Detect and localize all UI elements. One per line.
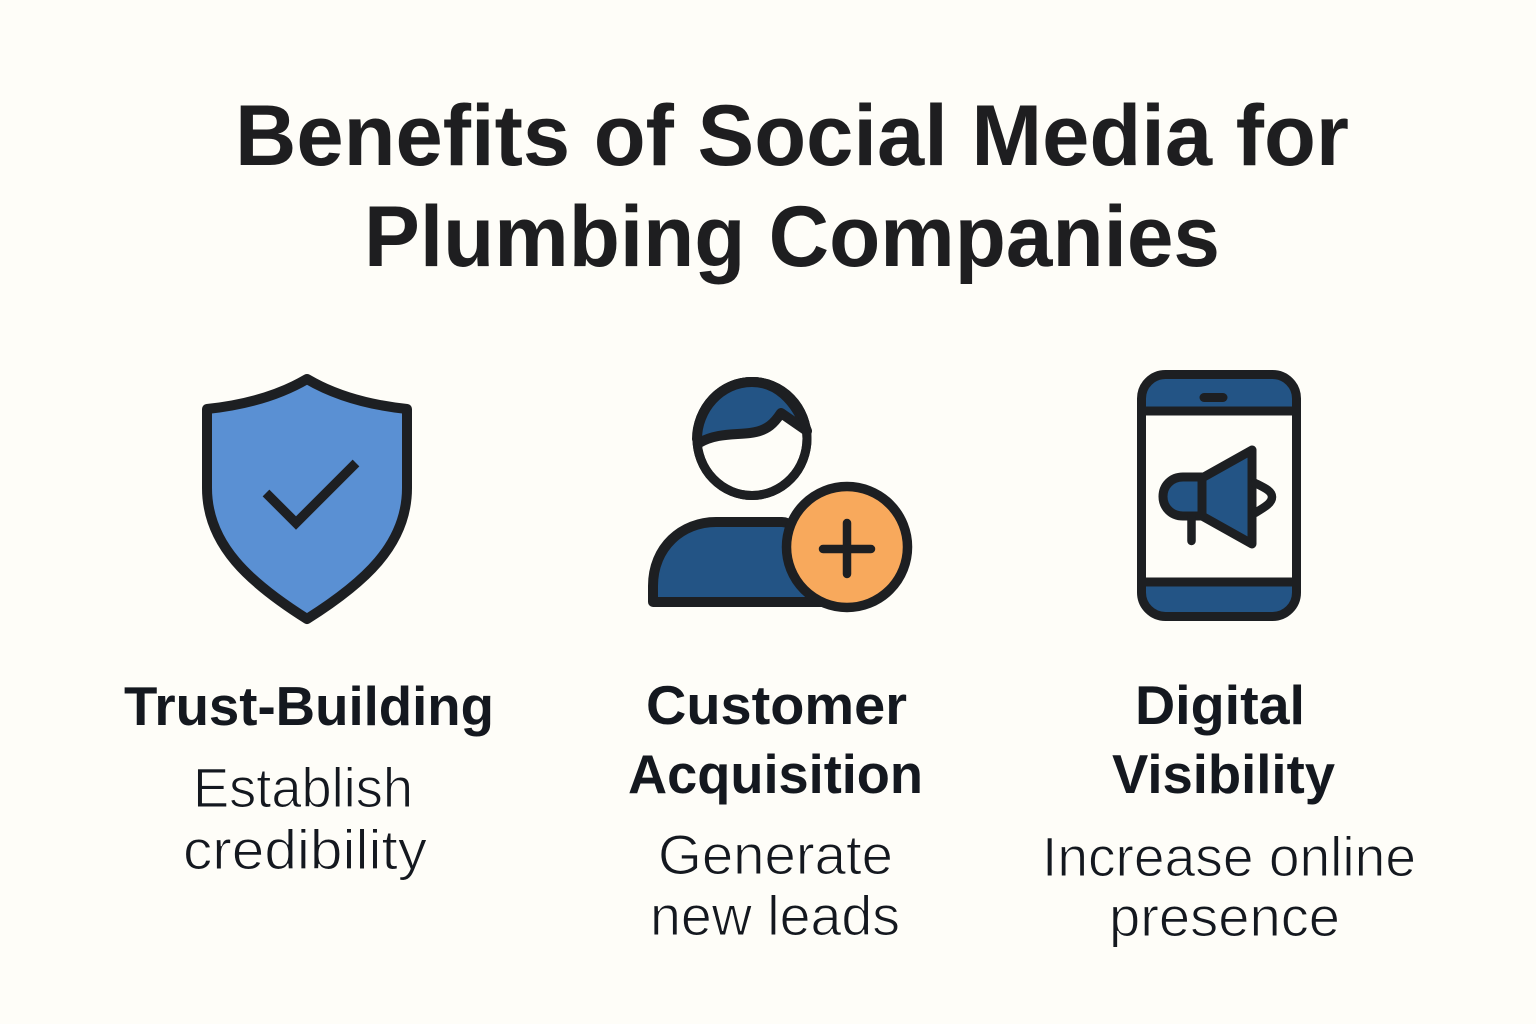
panel: customer acquisition xyxy=(628,382,923,947)
title: Benefits of Social Media for xyxy=(235,88,1349,184)
description: establish credibility: Establish xyxy=(193,756,413,819)
panel: trust-building xyxy=(124,379,494,881)
heading: Digital Visibility: Digital xyxy=(1135,674,1305,736)
title: Plumbing Companies xyxy=(364,189,1220,285)
heading: Digital Visibility: Visibility xyxy=(1112,743,1335,805)
description: increase online presence xyxy=(1042,825,1416,948)
description: establish credibility: credibility xyxy=(183,818,427,881)
heading: Trust-Building: Trust-Building xyxy=(124,675,494,737)
icon: smartphone with megaphone xyxy=(1141,374,1297,616)
icon: person with plus badge xyxy=(653,382,908,608)
icon: shield with check mark xyxy=(207,379,407,619)
description: increase online presence: Increase online xyxy=(1042,825,1416,888)
description: generate new leads xyxy=(650,823,900,947)
heading: Customer Acquisition xyxy=(628,674,923,805)
description: generate new leads: Generate xyxy=(658,823,893,886)
heading: Customer Acquisition: Customer xyxy=(646,674,907,736)
panel: digital visibility xyxy=(1042,374,1416,948)
description: establish credibility xyxy=(183,756,427,881)
description: generate new leads: new leads xyxy=(650,884,900,947)
heading: Digital Visibility xyxy=(1112,674,1335,805)
title xyxy=(235,88,1349,285)
heading: Customer Acquisition: Acquisition xyxy=(628,743,923,805)
description: increase online presence: presence xyxy=(1109,885,1340,948)
